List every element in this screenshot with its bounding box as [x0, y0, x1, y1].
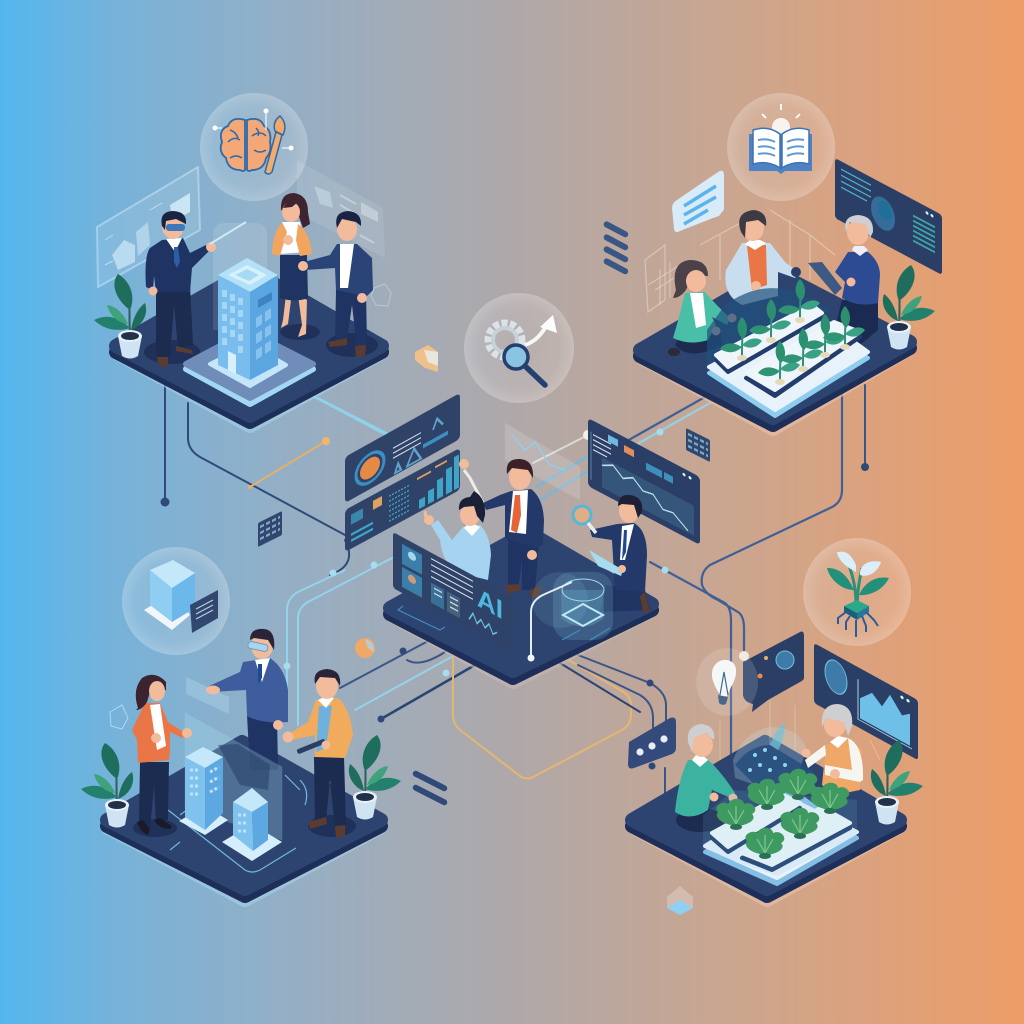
icon: keypad left	[258, 511, 282, 547]
list icon	[603, 220, 629, 275]
glass enclosure	[703, 790, 857, 876]
circular icon: gear with magnifier and arrow	[464, 293, 574, 403]
shadows	[144, 324, 378, 364]
plant	[94, 274, 146, 358]
dark speech screen	[743, 632, 804, 712]
chat bubble	[672, 171, 724, 232]
plant	[871, 740, 923, 824]
dark screen	[835, 158, 942, 275]
seedlings	[720, 279, 865, 385]
icon: wireframe hex	[371, 284, 391, 306]
plant left	[81, 743, 133, 828]
plant right	[349, 735, 401, 820]
holographic glass panel	[185, 713, 282, 840]
old woman in teal sweater	[675, 724, 738, 832]
man with visor	[146, 211, 246, 367]
man with red tie	[459, 459, 544, 598]
wireframe gem	[110, 705, 128, 729]
panel: centre AI analytics team	[345, 293, 700, 682]
panel: bottom-left smart building team	[81, 547, 401, 900]
platform	[107, 742, 381, 900]
small hologram card	[186, 677, 229, 714]
circular icon: open book	[727, 93, 835, 201]
icon: glass cube	[667, 886, 693, 915]
building A	[179, 747, 228, 835]
message dots icon	[628, 718, 676, 768]
panel: bottom-right sustainable farming team	[628, 538, 923, 900]
front AI screen	[393, 532, 513, 653]
holographic panel right	[297, 160, 385, 258]
glass pillar	[213, 223, 267, 330]
man in white jacket	[725, 210, 801, 305]
plant	[883, 265, 935, 350]
building B	[222, 788, 282, 861]
hydroponic planter	[709, 305, 868, 416]
old man with tablet	[808, 215, 880, 345]
man with goggles	[206, 629, 288, 770]
icon: orange ball	[355, 638, 375, 658]
water dome	[733, 722, 815, 800]
building base	[186, 331, 313, 404]
hydroponic planter	[705, 790, 857, 884]
leafy plants	[716, 769, 849, 859]
icon: double bars	[412, 770, 448, 806]
panel: top-left architecture team	[94, 93, 385, 426]
holographic map panel	[505, 423, 580, 500]
platform	[640, 272, 910, 429]
woman in teal jacket	[668, 260, 736, 356]
old woman in orange vest	[802, 704, 863, 795]
analytics screen right with line chart	[588, 418, 700, 545]
holographic water dome	[707, 288, 830, 385]
wireframes	[720, 700, 880, 780]
circular icon: data cube	[122, 547, 230, 655]
floor trace	[398, 606, 610, 640]
circuit traces	[168, 775, 307, 872]
dark map inset	[218, 744, 270, 790]
man in navy blazer	[298, 211, 373, 357]
analytics screen bottom with bars	[345, 448, 460, 552]
analytics screen top	[345, 393, 460, 503]
platform	[116, 270, 382, 426]
circular icon: sprout with circuit roots	[803, 538, 911, 646]
hologram database cylinder	[528, 572, 613, 662]
platform	[632, 742, 900, 900]
platform	[390, 532, 652, 682]
icon: orange shard	[415, 345, 438, 372]
woman in light-blue sweater	[424, 491, 491, 580]
man with magnifier and tablet	[573, 495, 650, 612]
AI label: AI	[477, 582, 503, 625]
icon: keypad top	[686, 428, 710, 462]
wall screen with chart	[814, 643, 918, 760]
woman in coral jacket	[132, 675, 192, 837]
panel: top-right hydroponics learning team	[603, 93, 942, 429]
hologram wireframes	[645, 210, 835, 312]
lightbulb bubble	[696, 648, 758, 716]
woman in orange jacket	[272, 193, 312, 337]
man in orange cardigan	[282, 669, 356, 838]
circular icon: brain and paintbrush	[200, 93, 308, 201]
building tower	[218, 258, 278, 380]
connector lines network	[160, 385, 869, 795]
holographic panel left	[97, 167, 200, 287]
